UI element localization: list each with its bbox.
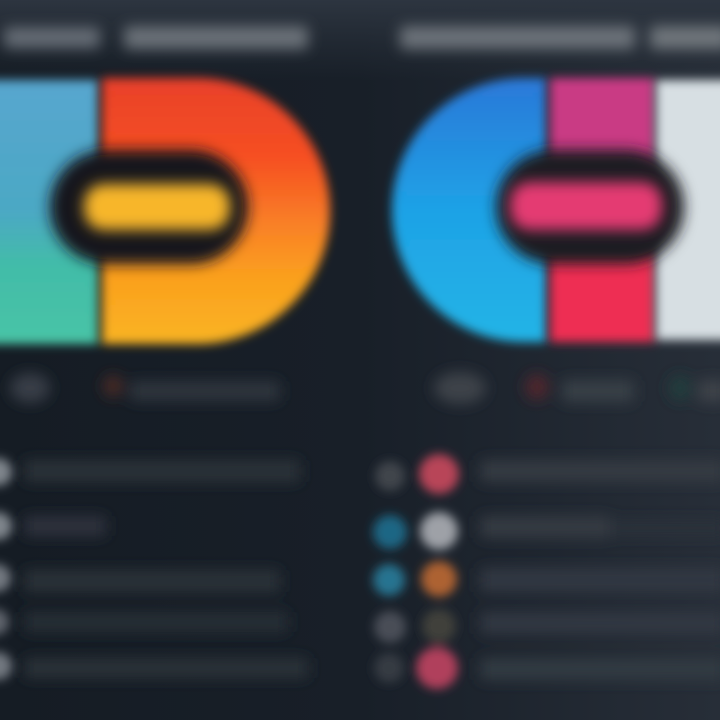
center pill: pink (510, 182, 662, 230)
row markers (0, 458, 12, 680)
top band (0, 0, 720, 80)
center pill: dark (496, 150, 684, 264)
legend: right (434, 372, 720, 404)
left markers (373, 461, 407, 683)
row bars (24, 460, 308, 678)
segment: orange arc (102, 78, 330, 344)
list: right (373, 454, 720, 689)
donut chart: left (0, 78, 330, 344)
segment: blue arc (392, 78, 546, 342)
heading: left (4, 26, 308, 49)
right markers (416, 454, 459, 689)
segment: red (550, 250, 654, 342)
segment: magenta (550, 78, 654, 178)
segment: teal (0, 80, 98, 344)
list: left (0, 458, 308, 680)
center pill: yellow (84, 184, 230, 230)
center pill: dark (50, 150, 248, 264)
legend: left (10, 373, 280, 403)
segment: white (656, 80, 720, 340)
row bars (480, 460, 720, 680)
heading: right (400, 26, 720, 49)
donut chart: right (392, 78, 720, 342)
